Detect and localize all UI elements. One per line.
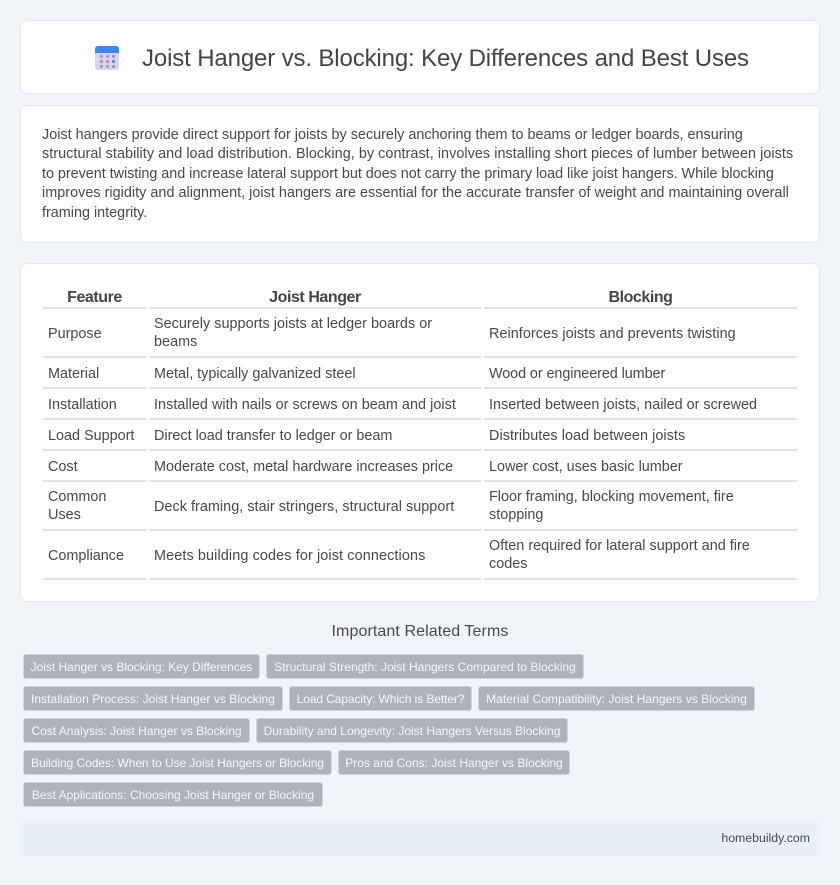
panel: comparison table: [20, 263, 820, 602]
chip: Cost Analysis: Joist Hanger vs Blocking: [31, 724, 242, 738]
table header: Joist Hanger: [269, 289, 361, 306]
chip: [23, 750, 332, 775]
chip: Load Capacity: Which is Better?: [297, 692, 464, 706]
chip: Joist Hanger vs Blocking: Key Differences: [31, 660, 252, 674]
chip: [23, 686, 283, 711]
intro text: to prevent twisting and increase lateral support but does not carry the primary load like joist hangers. While blocking: [42, 166, 774, 182]
footer: [20, 821, 820, 855]
row: Load Support: Direct load transfer to ledger or beam: [154, 428, 392, 444]
chip: [256, 718, 568, 743]
row: Purpose: Reinforces joists and prevents twisting: [489, 326, 736, 342]
footer source: homebuildy.com: [721, 831, 810, 845]
intro text: improves rigidity and alignment, joist hangers are essential for the accurate transfer of weight and maintaining overall: [42, 185, 789, 201]
related terms chips: [23, 654, 755, 807]
row: Material: [43, 366, 797, 389]
row: Common Uses: Floor framing, blocking movement, fire: [489, 489, 734, 505]
row: Cost: Moderate cost, metal hardware increases price: [154, 459, 453, 475]
chip: [338, 750, 570, 775]
row: Compliance: codes: [489, 556, 528, 572]
row: Cost: Cost: [48, 459, 78, 475]
chip: [289, 686, 472, 711]
table header: Feature: [67, 289, 122, 306]
row: Common Uses: Deck framing, stair stringers, structural support: [154, 499, 454, 515]
row: Purpose: [43, 316, 797, 358]
row: Compliance: [43, 538, 797, 580]
chip: [478, 686, 755, 711]
row: Compliance: Often required for lateral support and fire: [489, 538, 750, 554]
table header: Blocking: [608, 289, 673, 306]
chip: Structural Strength: Joist Hangers Compared to Blocking: [274, 660, 576, 674]
row: Installation: Installation: [48, 397, 117, 413]
intro text: framing integrity.: [42, 205, 147, 221]
row: Common Uses: Common: [48, 489, 106, 505]
row: Common Uses: Uses: [48, 507, 81, 523]
row: Installation: Installed with nails or screws on beam and joist: [154, 397, 456, 413]
panel: header: [20, 20, 820, 94]
row: Common Uses: [43, 489, 797, 531]
title: Joist Hanger vs. Blocking: Key Differences and Best Uses: [142, 45, 749, 72]
chip: [23, 718, 250, 743]
heading: related terms: Important Related Terms: [332, 623, 508, 640]
intro text: structural stability and load distribution. Blocking, by contrast, involves installing short pieces of lumber between joists: [42, 146, 793, 162]
row: Compliance: Meets building codes for joist connections: [154, 548, 425, 564]
icon: calendar: [95, 46, 119, 70]
table header: [43, 289, 797, 309]
row: Cost: Lower cost, uses basic lumber: [489, 459, 683, 475]
row: Load Support: Load Support: [48, 428, 134, 444]
row: Installation: [43, 397, 797, 420]
chip: Material Compatibility: Joist Hangers vs Blocking: [486, 692, 747, 706]
chip: [23, 782, 323, 807]
intro text: Joist hangers provide direct support for joists by securely anchoring them to beams or ledger boards, ensuring: [42, 126, 743, 142]
intro text: [42, 126, 793, 221]
chip: [266, 654, 584, 679]
chip: Durability and Longevity: Joist Hangers Versus Blocking: [264, 724, 560, 738]
chip: Installation Process: Joist Hanger vs Blocking: [31, 692, 275, 706]
row: Common Uses: stopping: [489, 507, 543, 523]
row: Installation: Inserted between joists, nailed or screwed: [489, 397, 757, 413]
row: Compliance: Compliance: [48, 548, 124, 564]
chip: Pros and Cons: Joist Hanger vs Blocking: [345, 756, 563, 770]
row: Purpose: Purpose: [48, 326, 102, 342]
row: Purpose: Securely supports joists at ledger boards or: [154, 316, 432, 332]
chip: Best Applications: Choosing Joist Hanger or Blocking: [32, 788, 314, 802]
row: Load Support: Distributes load between joists: [489, 428, 685, 444]
row: Cost: [43, 459, 797, 482]
row: Material: Material: [48, 366, 99, 382]
chip: Building Codes: When to Use Joist Hangers or Blocking: [31, 756, 324, 770]
row: Material: Metal, typically galvanized steel: [154, 366, 356, 382]
panel: introduction: [20, 105, 820, 243]
chip: [23, 654, 260, 679]
row: Purpose: beams: [154, 334, 197, 350]
row: Load Support: [43, 428, 797, 451]
row: Material: Wood or engineered lumber: [489, 366, 665, 382]
